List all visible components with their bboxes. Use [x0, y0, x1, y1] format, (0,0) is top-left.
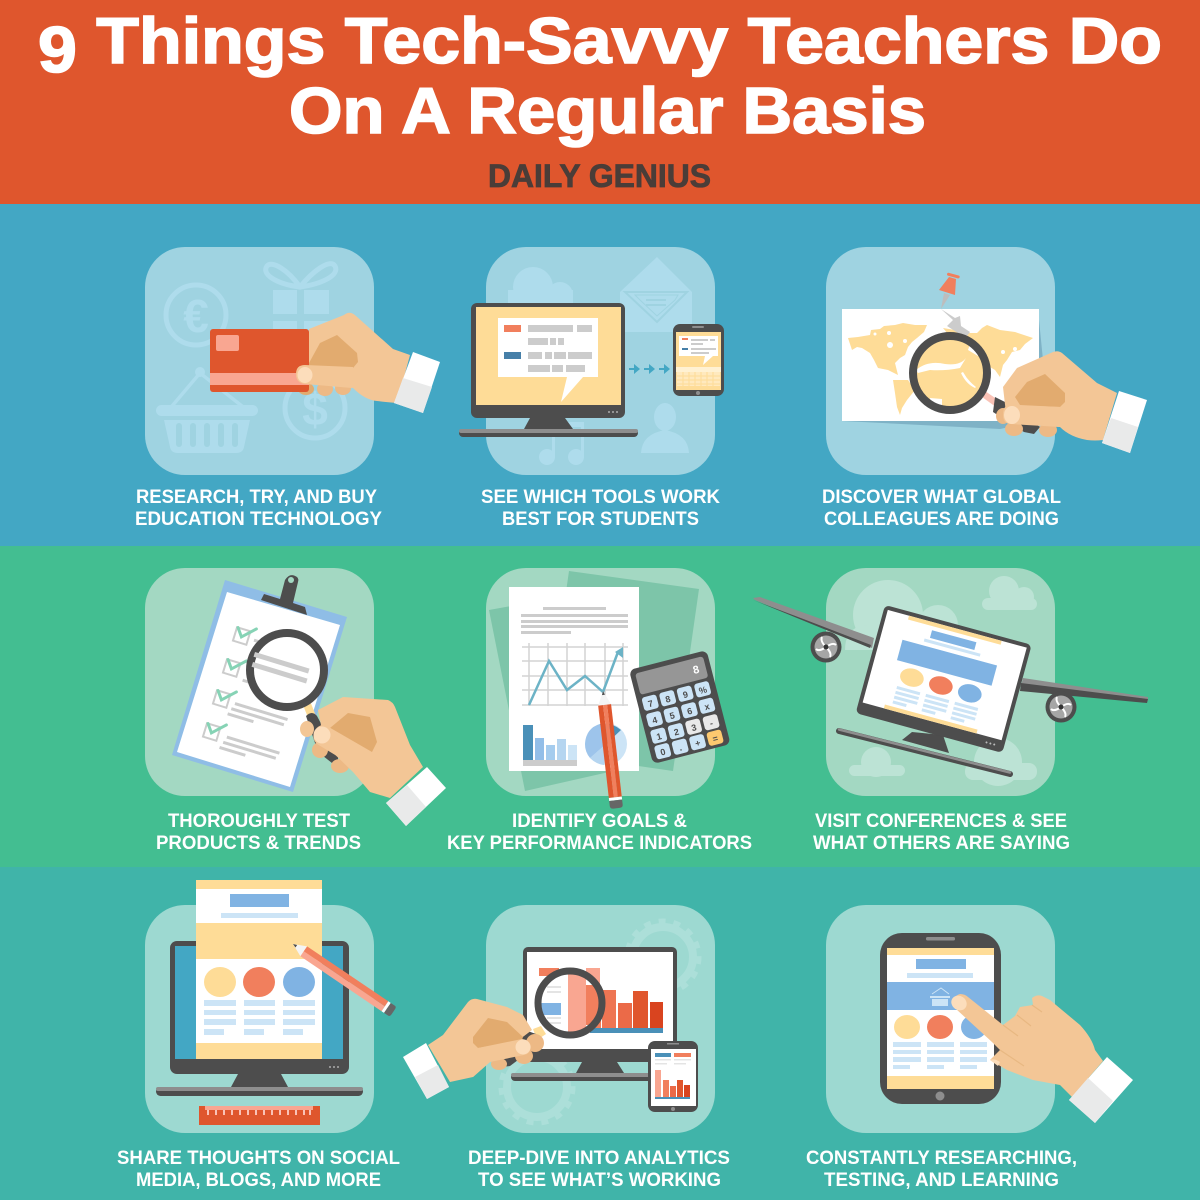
panel: thoroughly test products and trends	[145, 568, 446, 854]
arrows	[629, 364, 670, 374]
calculator: 8	[692, 664, 701, 677]
calculator: 7	[647, 698, 654, 709]
label	[447, 811, 752, 854]
checklist item	[233, 623, 276, 652]
phone	[673, 324, 724, 396]
label: KEY PERFORMANCE INDICATORS	[447, 833, 752, 854]
map shadow	[842, 320, 1043, 429]
left wing	[753, 597, 874, 648]
calculator: 2	[673, 727, 680, 738]
right wing	[1020, 678, 1148, 703]
icon: gear top	[627, 921, 699, 993]
checklist item	[211, 686, 291, 733]
engine right	[1046, 692, 1076, 722]
panel: deep-dive into analytics	[403, 905, 730, 1191]
title: Things Tech-Savvy Teachers Do	[77, 4, 1162, 77]
label: PRODUCTS & TRENDS	[156, 833, 361, 854]
calculator: +	[694, 738, 702, 749]
label	[806, 1148, 1077, 1191]
calculator: -	[709, 718, 714, 728]
label: SEE WHICH TOOLS WORK	[481, 487, 720, 508]
label	[468, 1148, 730, 1191]
band: row 2 green	[0, 546, 1200, 867]
magnifier	[250, 633, 338, 763]
calculator: 9	[682, 689, 689, 700]
title: 9	[38, 13, 77, 86]
calculator: x	[703, 701, 711, 712]
monitor	[156, 941, 363, 1096]
icon: euro coin	[166, 285, 226, 345]
engine left	[810, 632, 842, 662]
hand with magnifier	[403, 999, 544, 1099]
label: SHARE THOUGHTS ON SOCIAL	[117, 1148, 400, 1169]
speech bubble	[498, 318, 598, 402]
icon: euro coin: €	[183, 290, 209, 342]
band: row 3 teal	[0, 867, 1200, 1200]
label: CONSTANTLY RESEARCHING,	[806, 1148, 1077, 1169]
magnifier over map	[913, 336, 1040, 434]
pencil	[290, 939, 397, 1017]
icon: gear bottom	[501, 1051, 573, 1123]
icon: basket	[930, 988, 950, 1006]
icon: envelope	[620, 257, 692, 332]
icon: person	[641, 403, 689, 453]
monitor	[459, 303, 638, 437]
icon: dollar coin: $	[302, 383, 328, 435]
calculator: 8	[664, 694, 672, 705]
label: COLLEAGUES ARE DOING	[824, 509, 1059, 530]
label	[117, 1148, 400, 1191]
monitor with bar chart	[511, 947, 690, 1081]
tablet with chart	[648, 1041, 698, 1112]
header band	[0, 0, 1200, 204]
panel: identify goals and KPIs	[447, 568, 752, 854]
panel: visit conferences	[753, 568, 1148, 854]
line chart	[522, 643, 628, 706]
calculator: 1	[655, 731, 663, 742]
magnifier	[500, 968, 606, 1066]
report sheet	[509, 587, 639, 771]
label: WHAT OTHERS ARE SAYING	[813, 833, 1070, 854]
label	[822, 487, 1061, 530]
background clouds	[845, 576, 1037, 786]
calculator	[629, 650, 731, 764]
web page	[196, 880, 322, 1059]
hand with magnifier	[300, 697, 446, 826]
icon: cloud	[508, 267, 573, 308]
calculator: 6	[686, 706, 693, 717]
calculator: =	[712, 733, 719, 744]
back papers	[489, 571, 699, 791]
title: On A Regular Basis	[289, 74, 926, 147]
checklist item	[201, 719, 283, 766]
label: DISCOVER WHAT GLOBAL	[822, 487, 1061, 508]
label: TESTING, AND LEARNING	[824, 1170, 1059, 1191]
label	[156, 811, 361, 854]
label: DEEP-DIVE INTO ANALYTICS	[468, 1148, 730, 1169]
label: THOROUGHLY TEST	[168, 811, 350, 832]
ruler	[199, 1106, 320, 1125]
calculator: 3	[690, 722, 698, 733]
icon: shopping basket	[156, 367, 258, 453]
calculator: 0	[659, 747, 667, 758]
icon: music notes	[539, 422, 584, 465]
icon: dollar coin	[285, 378, 345, 438]
panel: discover what global colleagues are doing	[822, 247, 1147, 530]
label: RESEARCH, TRY, AND BUY	[136, 487, 377, 508]
title	[38, 4, 1162, 147]
label: IDENTIFY GOALS &	[512, 811, 687, 832]
panel: share thoughts on social media	[117, 880, 400, 1191]
label	[481, 487, 720, 530]
label: BEST FOR STUDENTS	[502, 509, 699, 530]
label: MEDIA, BLOGS, AND MORE	[136, 1170, 381, 1191]
calculator: 5	[669, 710, 676, 721]
tilted monitor	[856, 605, 1032, 753]
panel: constantly researching	[806, 905, 1133, 1191]
label: VISIT CONFERENCES & SEE	[815, 811, 1067, 832]
label: EDUCATION TECHNOLOGY	[135, 509, 382, 530]
calculator: .	[678, 742, 683, 753]
band: row 1 blue	[0, 204, 1200, 546]
panel: see which tools work	[459, 247, 724, 530]
checklist item	[222, 655, 262, 686]
pencil	[597, 690, 623, 809]
tablet	[880, 933, 1001, 1104]
icon: pin shadow	[941, 309, 970, 336]
icon: push pin	[939, 272, 960, 309]
pie chart	[585, 723, 627, 765]
panel: research, try and buy	[135, 247, 440, 530]
hand holding card	[210, 313, 440, 413]
icon: gift box	[266, 264, 336, 351]
calculator: 4	[651, 715, 658, 726]
calculator: %	[698, 684, 708, 696]
label	[135, 487, 382, 530]
monitor stand and base	[839, 730, 1010, 774]
bar chart	[523, 725, 577, 766]
hand with magnifier	[996, 351, 1147, 453]
label	[813, 811, 1070, 854]
brand name: DAILY GENIUS	[488, 158, 711, 194]
credit card	[210, 329, 309, 392]
pointing hand	[948, 993, 1133, 1123]
clipboard	[172, 575, 347, 792]
world map	[842, 309, 1039, 421]
label: TO SEE WHAT’S WORKING	[478, 1170, 721, 1191]
